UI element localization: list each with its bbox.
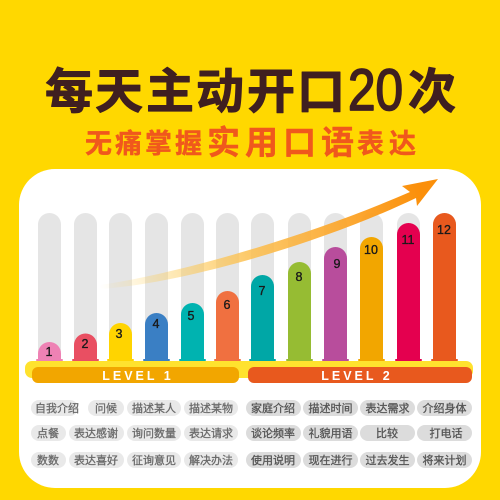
level 1 topic chips: 问候 — [95, 401, 117, 415]
level 1 banner — [32, 367, 239, 383]
level 2 topic chips: 过去发生 — [366, 453, 410, 467]
bar 6 — [214, 291, 241, 361]
title: 开 — [247, 66, 295, 119]
level 1 topic chips: 点餐 — [37, 426, 59, 440]
level 2 topic chips — [246, 400, 472, 468]
bar numbers: 4 — [153, 317, 160, 331]
level 1 topic chips: 表达喜好 — [74, 453, 118, 467]
subtitle: 无痛掌握 — [85, 129, 205, 159]
title: 动 — [196, 66, 244, 119]
bar tracks — [38, 213, 456, 361]
bar numbers: 3 — [116, 327, 123, 341]
level 1 topic chips: 自我介绍 — [35, 401, 79, 415]
bar 3 — [107, 323, 134, 361]
level 1 topic chips: 询问数量 — [132, 427, 176, 440]
level 2 topic chips: 介绍身体 — [422, 401, 466, 415]
level 2 banner: LEVEL 2 — [321, 369, 393, 383]
bar 4 — [143, 313, 170, 361]
bar numbers: 9 — [334, 257, 341, 271]
level 2 topic chips: 描述时间 — [308, 401, 352, 415]
bar 10 — [358, 237, 385, 361]
panel: progress chart — [19, 169, 481, 488]
level 2 banner — [248, 367, 472, 383]
level 2 topic chips: 家庭介绍 — [251, 401, 295, 415]
title: 天 — [95, 66, 143, 119]
bar 11 — [395, 223, 422, 361]
level 1 topic chips: 征询意见 — [132, 453, 176, 467]
level 2 topic chips: 比较 — [376, 426, 398, 440]
level 2 topic chips: 表达需求 — [366, 401, 410, 415]
bar numbers: 8 — [296, 270, 303, 284]
bar numbers: 12 — [437, 223, 451, 237]
bar numbers: 6 — [224, 298, 231, 312]
bar numbers: 10 — [364, 243, 378, 257]
level 2 topic chips: 谈论频率 — [251, 426, 295, 440]
level 1 topic chips: 描述某人 — [132, 401, 176, 415]
bar 12 — [431, 213, 458, 361]
level 1 topic chips: 表达请求 — [189, 426, 233, 440]
subtitle — [85, 124, 421, 161]
level 1 topic chips: 解决办法 — [189, 453, 233, 467]
bar 8 — [286, 262, 313, 361]
bar 7 — [249, 275, 276, 361]
bar numbers: 2 — [82, 337, 89, 351]
title: 主 — [146, 66, 194, 119]
bar numbers: 11 — [402, 233, 415, 247]
title — [45, 58, 456, 123]
bar 2 — [72, 334, 99, 361]
level 1 topic chips: 表达感谢 — [74, 426, 118, 440]
level 1 topic chips — [31, 400, 238, 468]
bar 5 — [179, 303, 206, 361]
level 2 topic chips: 现在进行 — [308, 454, 352, 467]
arrow: rising trend — [100, 179, 438, 289]
bar numbers: 5 — [188, 309, 195, 323]
bar numbers: 7 — [259, 284, 266, 298]
title: 每 — [45, 66, 93, 119]
level 1 topic chips: 数数 — [37, 454, 59, 467]
level 1 topic chips: 描述某物 — [189, 401, 233, 415]
bar numbers: 1 — [46, 345, 53, 359]
title: 20 — [348, 58, 403, 123]
level 2 topic chips: 打电话 — [430, 426, 462, 440]
level 1 banner: LEVEL 1 — [102, 369, 174, 383]
bar 1 — [36, 342, 63, 361]
level 2 topic chips: 礼貌用语 — [308, 426, 352, 440]
title: 次 — [408, 66, 456, 119]
bar numbers — [46, 223, 451, 359]
level 2 topic chips: 使用说明 — [251, 453, 295, 467]
level 2 topic chips: 将来计划 — [422, 454, 466, 467]
title: 口 — [297, 66, 345, 119]
bar 9 — [322, 247, 349, 361]
base strip — [25, 361, 473, 378]
subtitle: 表达 — [357, 129, 421, 159]
subtitle: 实用口语 — [207, 124, 359, 161]
